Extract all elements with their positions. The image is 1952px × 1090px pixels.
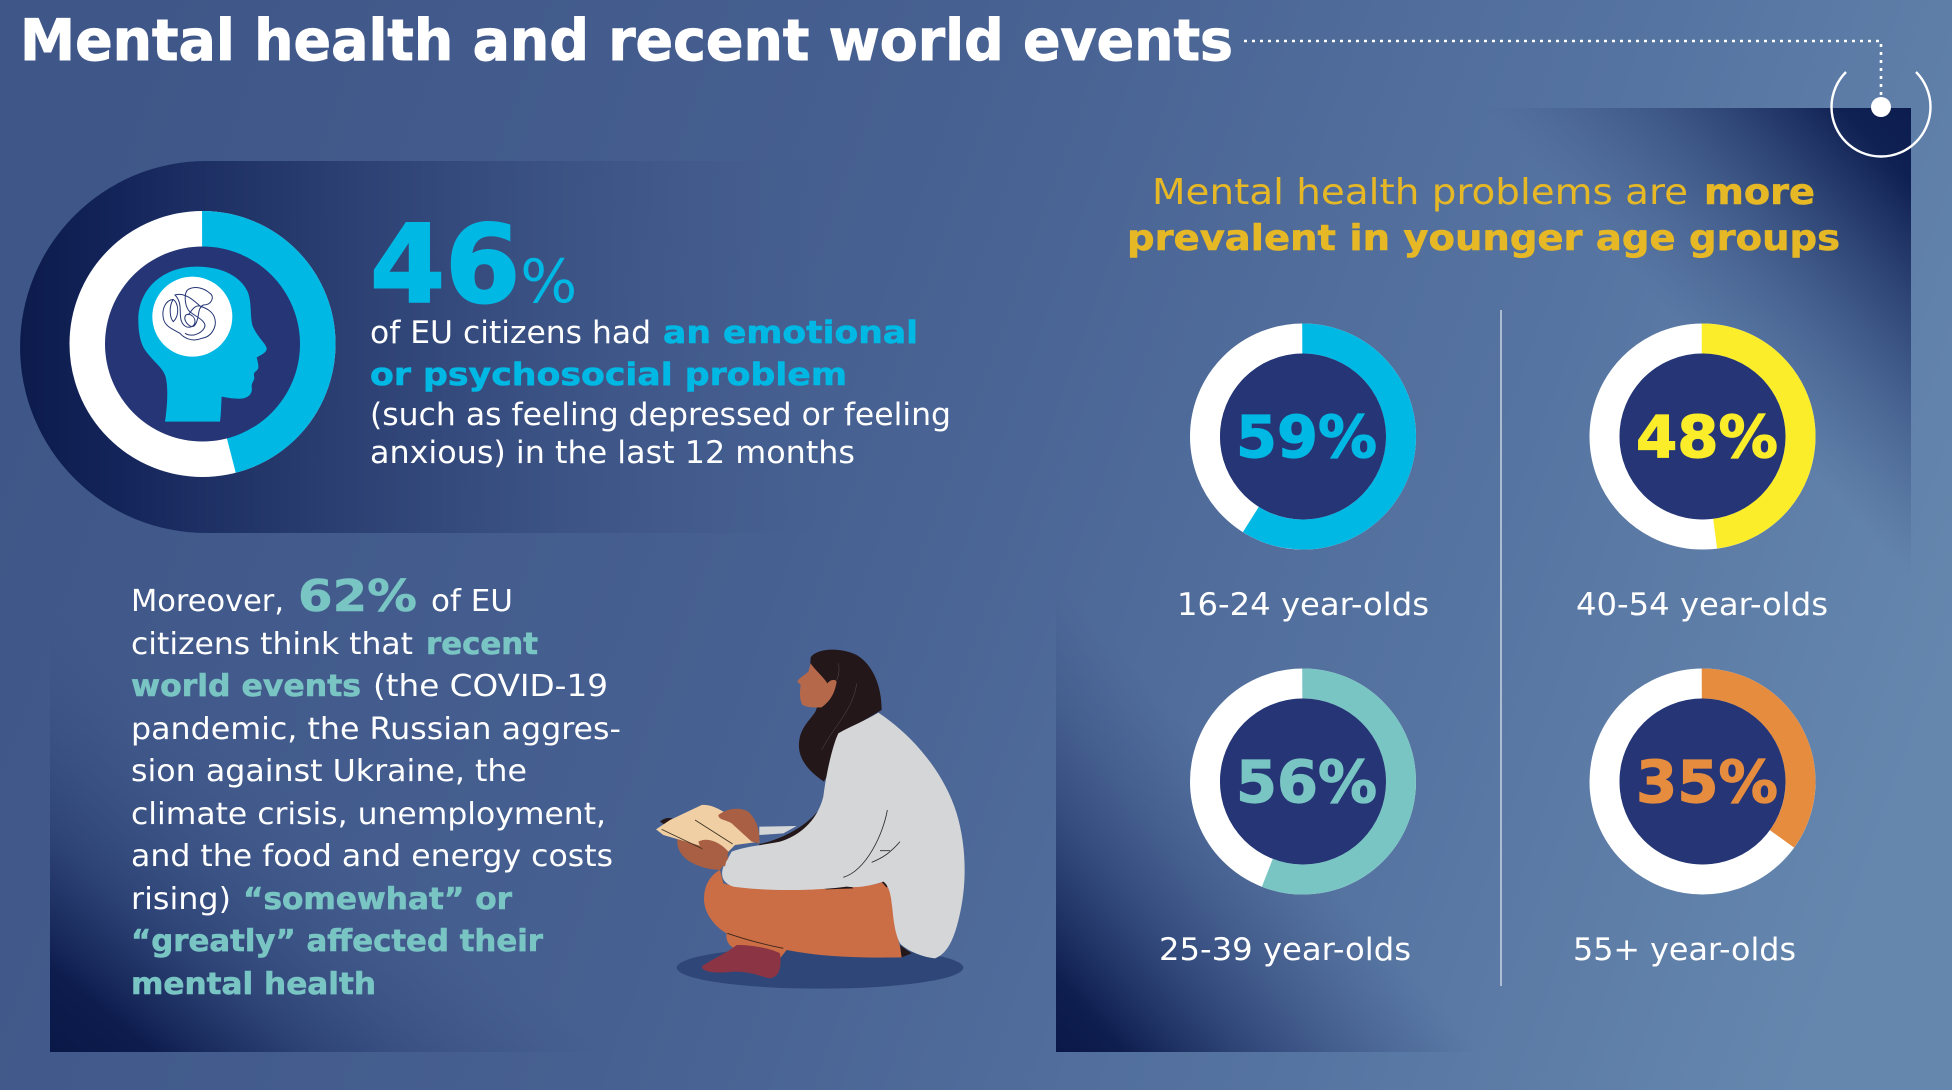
body text: sion against Ukraine, the xyxy=(131,754,527,789)
donut: 16-24 year-olds 59%: 16-24 year-olds xyxy=(1177,587,1429,623)
donut: 25-39 year-olds 56%: 56% xyxy=(1236,748,1377,816)
body text: mental health xyxy=(131,967,376,1002)
body text: climate crisis, unemployment, xyxy=(131,797,606,832)
body text: “somewhat” or xyxy=(243,882,512,917)
heading: age groups: Mental health problems are xyxy=(1152,172,1688,213)
donut: 40-54 year-olds 48% xyxy=(1576,338,1828,623)
panel: age groups background xyxy=(1056,108,1911,1052)
description text xyxy=(370,315,951,471)
body text xyxy=(131,571,621,1002)
description text: or psychosocial problem xyxy=(370,357,847,393)
body text: of EU xyxy=(431,584,513,619)
body text: 62% xyxy=(298,571,417,622)
vertical divider xyxy=(1500,310,1502,986)
big number 46%: 46% xyxy=(370,203,577,328)
body text: citizens think that xyxy=(131,627,413,662)
body text: rising) xyxy=(131,882,231,917)
body text: world events xyxy=(131,669,361,704)
body text: and the food and energy costs xyxy=(131,839,613,874)
donut: 46% with head icon xyxy=(88,229,318,459)
body text: recent xyxy=(426,627,538,662)
icon: head silhouette xyxy=(138,267,267,422)
title: Mental health and recent world events xyxy=(20,8,1233,74)
donut: 40-54 year-olds 48%: 48% xyxy=(1636,403,1778,471)
donut: 25-39 year-olds 56% xyxy=(1159,684,1411,968)
description text: (such as feeling depressed or feeling xyxy=(370,397,951,433)
panel background xyxy=(50,530,690,1052)
body text: (the COVID-19 xyxy=(373,669,608,704)
donut: 16-24 year-olds 59% xyxy=(1177,338,1429,623)
dotted connector line xyxy=(1244,41,1881,97)
donut: 55+ year-olds 35%: 55+ year-olds xyxy=(1573,932,1796,968)
donut: 16-24 year-olds 59%: 59% xyxy=(1236,403,1377,471)
pill background xyxy=(20,161,820,533)
icon: tangled scribble xyxy=(163,288,215,340)
description text: of EU citizens had xyxy=(370,315,651,351)
illustration: seated woman reading xyxy=(656,650,965,989)
panel: 46% statistic xyxy=(20,161,951,533)
heading: age groups: more xyxy=(1704,172,1815,213)
donut: 55+ year-olds 35% xyxy=(1573,684,1800,968)
body text: Moreover, xyxy=(131,584,284,619)
description text: anxious) in the last 12 months xyxy=(370,435,855,471)
body text: “greatly” affected their xyxy=(131,924,543,959)
body text: pandemic, the Russian aggres- xyxy=(131,712,621,747)
donut: 55+ year-olds 35%: 35% xyxy=(1636,748,1778,816)
heading: age groups: prevalent in younger age groups xyxy=(1127,218,1840,259)
icon: target ring with dot xyxy=(1832,72,1930,157)
panel: recent world events xyxy=(50,530,690,1052)
heading: age groups xyxy=(1127,172,1840,259)
description text: an emotional xyxy=(663,315,918,351)
donut: 40-54 year-olds 48%: 40-54 year-olds xyxy=(1576,587,1828,623)
donut: 25-39 year-olds 56%: 25-39 year-olds xyxy=(1159,932,1411,968)
